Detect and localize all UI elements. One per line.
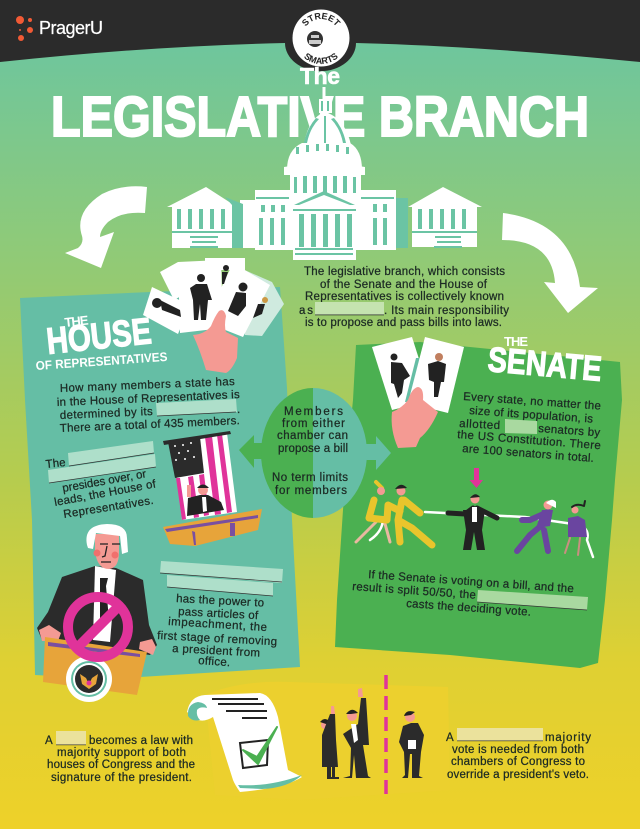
text: house membership: in the House of Representatives is <box>57 389 240 409</box>
text: impeachment: office. <box>198 655 231 669</box>
text: veto override: majority <box>545 732 591 744</box>
heading: The House of Representatives: HOUSE <box>45 310 153 362</box>
text: veto override: A <box>446 732 454 744</box>
panel: shared facts: Members <box>284 406 343 418</box>
text: impeachment <box>157 561 283 669</box>
text: introduction: The legislative branch, which consists <box>304 266 505 278</box>
panel: shared facts: chamber can <box>277 430 348 442</box>
text: senate allotment: the US Constitution. There <box>457 429 601 452</box>
text: introduction <box>299 266 509 329</box>
illustration: tug of war <box>356 482 593 557</box>
icon: pink down arrow <box>470 468 483 488</box>
icon: prohibition sign <box>68 597 128 657</box>
text: speaker of the house <box>45 441 158 521</box>
heading: The Senate: SENATE <box>486 340 603 389</box>
heading: The House of Representatives: OF REPRESENTATIVES <box>35 350 168 373</box>
text: introduction: as <box>299 305 313 317</box>
text: senate allotment: allotted <box>459 418 500 432</box>
text: house membership: How many members a state has <box>60 376 235 395</box>
illustration: hand holding house cards <box>143 258 284 373</box>
panel: Senate <box>335 334 622 668</box>
text: senate allotment: senators by <box>538 423 601 439</box>
text: bill becomes law: A <box>45 735 53 747</box>
icon: left arrow <box>65 186 147 268</box>
text: introduction: of the Senate and the House of <box>320 279 488 291</box>
text: introduction: is to propose and pass bills into laws. <box>305 317 502 329</box>
panel: shared facts: No term limits <box>272 472 348 484</box>
text: introduction: . Its main responsibility <box>384 305 509 317</box>
panel: shared facts <box>239 388 391 518</box>
text: bill becomes law <box>45 731 195 784</box>
text: veto override: chambers of Congress to <box>451 756 585 768</box>
text: impeachment: a president from <box>172 643 260 660</box>
text: impeachment: first stage of removing <box>157 630 277 648</box>
logo: Street Smarts: STREET <box>302 12 341 26</box>
text: vice president: result is split 50/50, the <box>352 581 476 602</box>
logo: PragerU: PragerU <box>39 18 103 38</box>
text: house membership: determined by its <box>60 406 153 422</box>
text: speaker of the house: The <box>45 457 66 471</box>
text: house membership: There are a total of 435 members. <box>60 415 240 435</box>
illustration: president at podium <box>37 524 157 702</box>
text: house membership: . <box>237 404 240 416</box>
text: introduction: Representatives is collectively known <box>305 291 504 303</box>
text: veto override: override a president's veto. <box>447 769 589 781</box>
illustration: capitol building <box>167 87 482 260</box>
panel: bottom yellow backdrop <box>205 682 450 800</box>
text: vice president: casts the deciding vote. <box>406 598 531 619</box>
text: senate allotment: Every state, no matter the <box>463 391 601 413</box>
panel: shared facts: for members <box>275 485 347 497</box>
text: senate allotment: are 100 senators in total. <box>462 443 594 465</box>
logo: PragerU <box>16 16 103 41</box>
text: veto override <box>446 728 591 781</box>
text: impeachment: impeachment, the <box>168 616 267 634</box>
text: speaker of the house: Representatives. <box>63 495 154 521</box>
text: bill becomes law: signature of the president. <box>51 772 192 784</box>
panel: shared facts: propose a bill <box>278 443 348 455</box>
illustration: speaker with flag <box>163 431 262 546</box>
illustration: voters and dividing line <box>320 675 424 795</box>
illustration: signed bill scroll <box>187 693 302 792</box>
illustration: hand holding senate cards <box>372 337 464 448</box>
icon: right arrow <box>502 213 598 313</box>
text: vice president <box>352 569 588 619</box>
text: bill becomes law: majority support of both <box>57 747 186 759</box>
text: senate allotment <box>457 391 601 465</box>
panel: House of Representatives <box>20 258 300 680</box>
logo: Street Smarts <box>292 10 350 66</box>
heading: The Senate: THE <box>504 334 528 349</box>
text: impeachment: has the power to <box>176 593 264 610</box>
text: bill becomes law: houses of Congress and the <box>47 759 195 771</box>
logo: Street Smarts: SMARTS <box>304 53 338 64</box>
text: senate allotment: size of its population, is <box>469 405 594 426</box>
heading: The House of Representatives <box>35 310 168 373</box>
text: vice president: If the Senate is voting on a bill, and the <box>368 569 574 595</box>
text: speaker of the house: leads, the House of <box>53 478 158 509</box>
panel: shared facts: from either <box>282 418 345 430</box>
text: house membership <box>57 376 240 435</box>
header band <box>0 0 640 71</box>
text: impeachment: pass articles of <box>178 606 259 622</box>
title: The: The <box>300 63 340 89</box>
text: bill becomes law: becomes a law with <box>89 735 193 747</box>
text: veto override: vote is needed from both <box>452 744 584 756</box>
icon: presidential seal <box>66 656 112 702</box>
text: speaker of the house: presides over, or <box>61 468 147 495</box>
heading: The House of Representatives: THE <box>64 313 90 330</box>
